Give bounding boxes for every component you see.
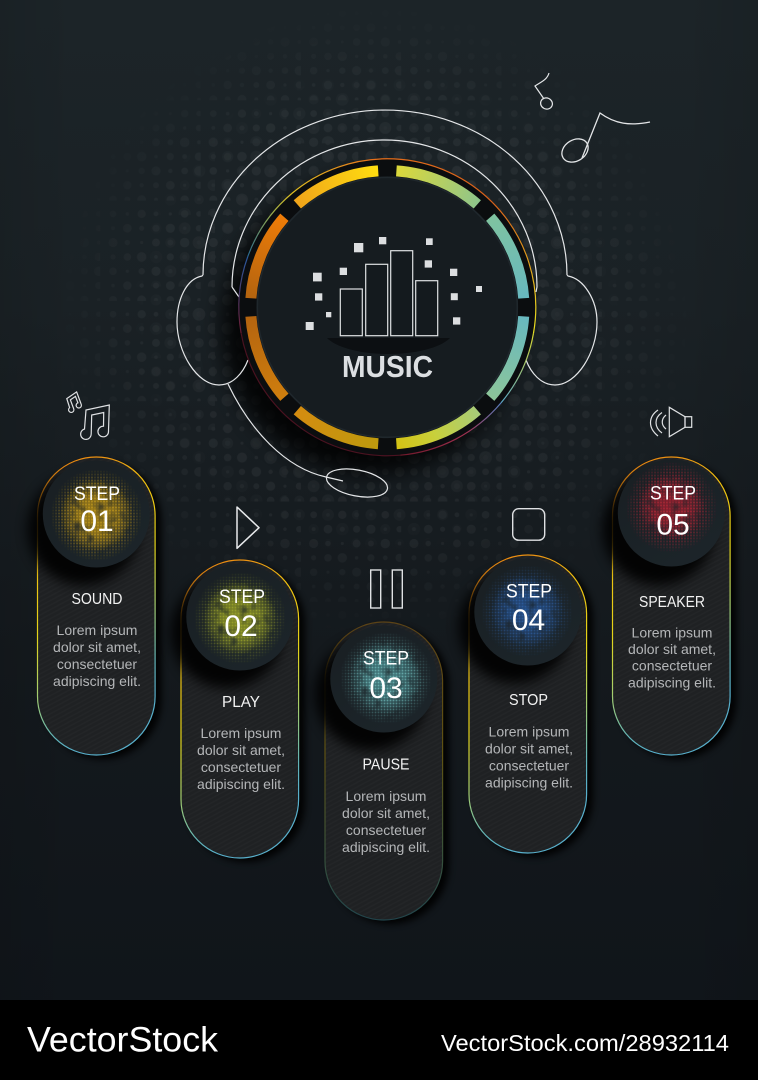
panel: step 05 speaker: SPEAKER (639, 594, 705, 611)
icon: stop (513, 509, 545, 540)
panel: step 02 play: consectetuer (201, 759, 281, 775)
panel: step 01 sound: 01 (80, 505, 114, 538)
panel: step 03 pause: dolor sit amet, (342, 805, 430, 821)
panel: step 03 pause: PAUSE (362, 756, 410, 774)
icon: pause (371, 570, 402, 608)
panel: step 01 sound: consectetuer (57, 656, 137, 672)
panel: step 01 sound (28, 457, 162, 759)
panel: step 05 speaker: Lorem ipsum (632, 624, 712, 640)
icon: small music note top (535, 73, 554, 111)
panel: step 02 play: adipiscing elit. (197, 776, 285, 792)
panel: step 02 play: STEP (219, 587, 265, 608)
coloured ring segments (251, 171, 524, 444)
panel: step 01 sound: STEP (74, 484, 120, 505)
panel: step 01 sound: adipiscing elit. (53, 673, 141, 689)
shadow under equalizer (327, 338, 450, 354)
panel: step 03 pause: 03 (369, 672, 403, 705)
panel: step 01 sound: SOUND (72, 591, 122, 608)
headphones outline (177, 110, 597, 502)
panel: step 04 stop: STOP (509, 692, 548, 709)
panel: step 05 speaker: dolor sit amet, (628, 641, 716, 657)
icon: speaker (650, 407, 692, 437)
panel: step 03 pause: consectetuer (346, 822, 426, 838)
music title: MUSIC (342, 349, 433, 384)
panel: step 02 play (171, 560, 305, 862)
panel: step 04 stop: dolor sit amet, (485, 740, 573, 756)
panel: step 04 stop: consectetuer (489, 758, 569, 774)
panel: step 04 stop: Lorem ipsum (489, 724, 569, 740)
panel: step 01 sound: Lorem ipsum (57, 622, 137, 638)
footer logo: VectorStock (27, 1020, 219, 1060)
panel: step 02 play: PLAY (222, 694, 260, 711)
panel: step 05 speaker: consectetuer (632, 658, 712, 674)
music dial (239, 159, 536, 456)
equalizer bars (340, 251, 438, 336)
panel: step 04 stop (459, 555, 593, 857)
panel: step 04 stop: adipiscing elit. (485, 774, 573, 790)
panel: step 02 play: Lorem ipsum (201, 725, 281, 741)
panel: step 01 sound: dolor sit amet, (53, 639, 141, 655)
icon: large music note top (558, 113, 650, 167)
panel: step 02 play: 02 (224, 610, 258, 643)
inner disc (257, 177, 517, 437)
panel: step 02 play: dolor sit amet, (197, 742, 285, 758)
panel: step 05 speaker: STEP (650, 484, 696, 504)
panel: step 05 speaker: 05 (656, 508, 690, 542)
panel: step 05 speaker (602, 457, 736, 759)
panel: step 04 stop: 04 (512, 604, 545, 637)
equalizer squares (306, 237, 482, 330)
panel: step 03 pause: adipiscing elit. (342, 839, 430, 855)
panel: step 03 pause: STEP (363, 648, 409, 670)
panel: step 03 pause: Lorem ipsum (346, 788, 426, 804)
icon: double music notes (63, 392, 109, 439)
main circle drop shadow (222, 178, 518, 474)
footer bar (0, 1000, 758, 1080)
icon: play (237, 507, 259, 548)
panel: step 03 pause (315, 622, 449, 924)
panel: step 04 stop: STEP (506, 582, 552, 602)
panel: step 05 speaker: adipiscing elit. (628, 674, 716, 690)
footer url: VectorStock.com/28932114 (441, 1030, 729, 1056)
